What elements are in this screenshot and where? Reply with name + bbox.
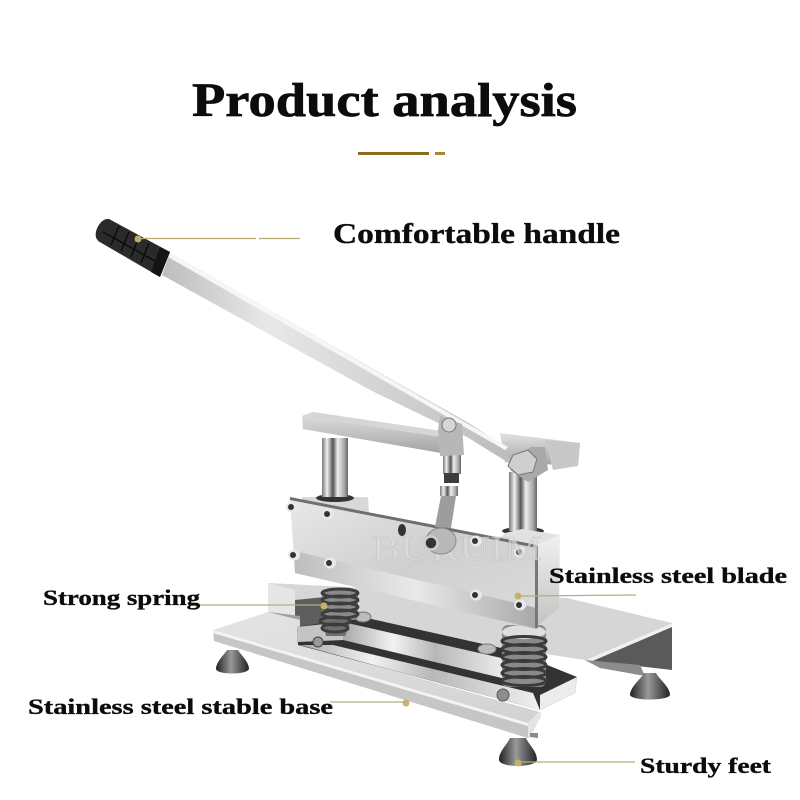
title: Product analysis (192, 74, 577, 127)
callout: comfortable handle: Comfortable handle (333, 219, 620, 250)
top crossbar (302, 412, 580, 470)
callout: sturdy feet: Sturdy feet (640, 753, 772, 778)
callout: stainless steel blade: Stainless steel blade (549, 563, 787, 588)
title underline accent (358, 152, 445, 155)
blade bolts (286, 502, 526, 610)
callout: stable base: Stainless steel stable base (28, 694, 333, 719)
base plate (213, 612, 541, 738)
guide columns (302, 438, 544, 540)
callout: stable base (28, 694, 410, 719)
callout: comfortable handle (134, 219, 620, 250)
left spring (320, 589, 358, 636)
callout: strong spring: Strong spring (43, 585, 200, 610)
blade plate (290, 497, 560, 629)
base: right rear tray (268, 583, 672, 676)
callout: sturdy feet (514, 753, 772, 778)
product illustration: slicer machine (92, 216, 672, 766)
foot: rear right (630, 673, 670, 700)
right spring (502, 625, 546, 687)
foot: rear left (216, 650, 249, 674)
callout: strong spring (43, 585, 328, 610)
adjustable link rod (424, 450, 461, 554)
black rubber grip (92, 216, 170, 277)
handle arm (162, 253, 512, 465)
foot: front (499, 738, 537, 766)
pivot bolt (508, 447, 548, 482)
watermark: BURUIM (372, 529, 542, 568)
callout: stainless steel blade (514, 563, 787, 600)
centre fixed block (297, 612, 577, 710)
